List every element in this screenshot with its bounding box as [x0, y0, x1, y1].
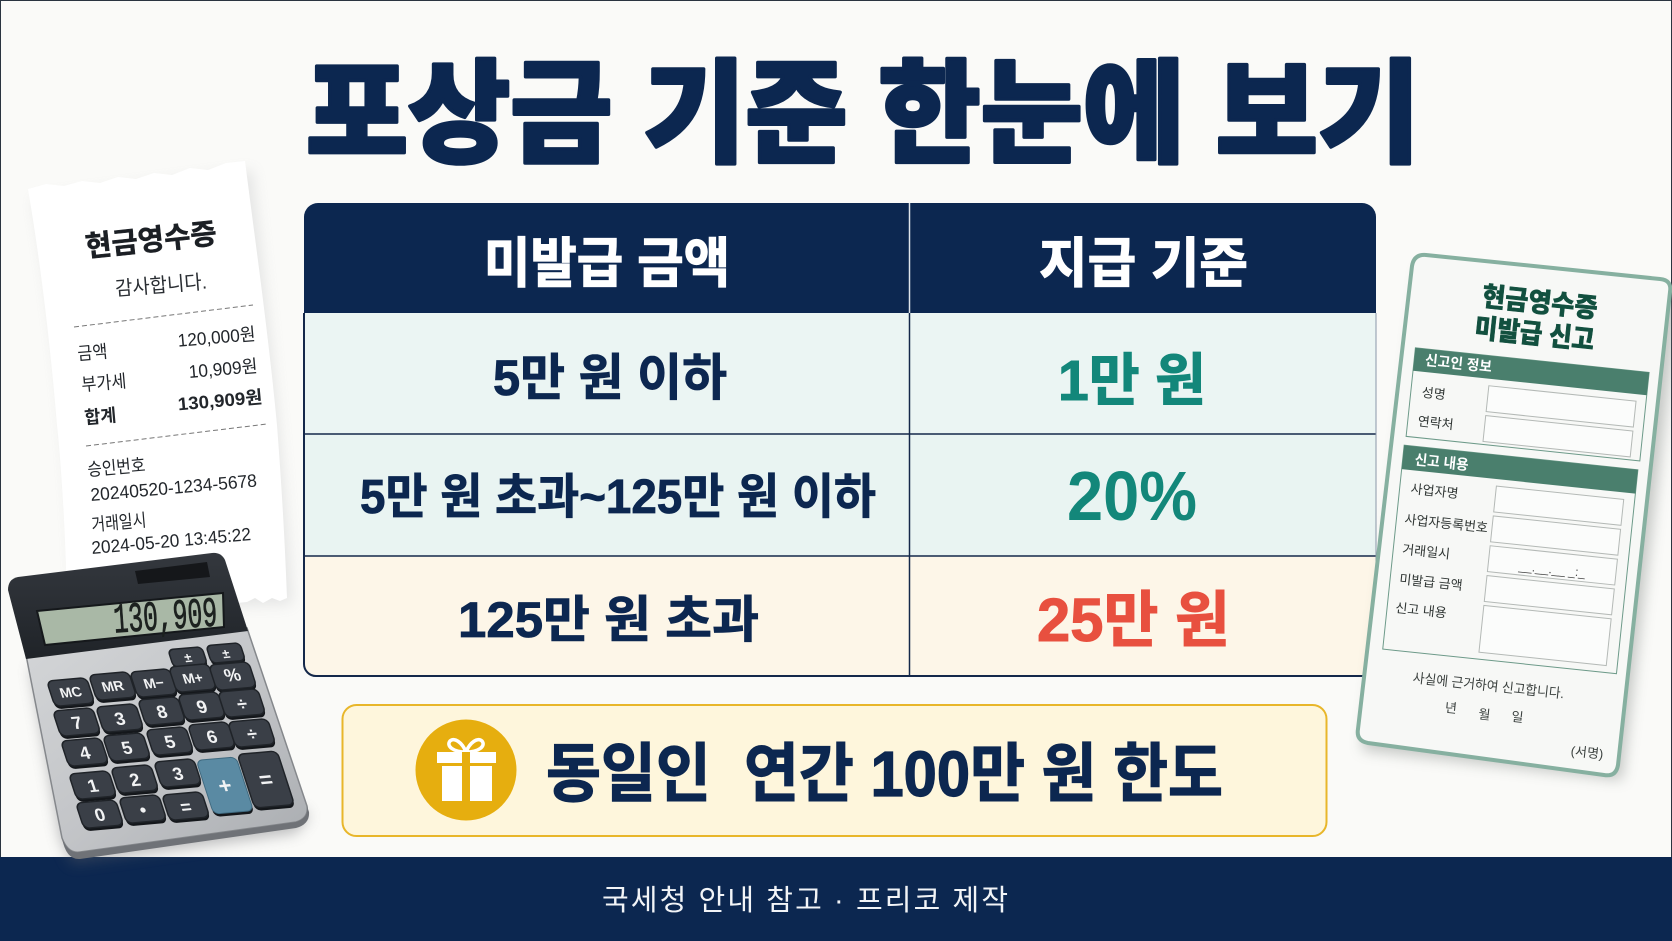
callout: annual limit [342, 705, 1326, 836]
receipt line items: 10,909원 [188, 356, 258, 382]
receipt shadow [34, 170, 292, 610]
calculator keys: 5 [162, 731, 178, 752]
section: report details: 미발급 금액 [1399, 571, 1463, 593]
calculator keys: 3 [170, 763, 186, 784]
calculator keys: ÷ [234, 693, 250, 714]
calculator keys: 8 [154, 701, 170, 722]
calculator keys: 4 [77, 742, 94, 763]
calculator keys: ÷ [244, 723, 260, 744]
calculator [8, 553, 310, 864]
receipt approval and date: 거래일시 [91, 510, 147, 535]
section: report details: 거래일시 [1402, 542, 1451, 562]
section: reporter info: 신고인 정보 [1424, 352, 1493, 376]
calculator keys: % [221, 664, 243, 685]
row 2 amount: 5만 원 초과~125만 원 이하 [360, 471, 876, 524]
section: report details: 신고 내용 [1395, 600, 1447, 621]
table header bar [304, 203, 1376, 313]
receipt heading: 현금영수증 [84, 217, 218, 264]
receipt line items: 130,909원 [177, 387, 263, 414]
receipt approval and date: 20240520-1234-5678 [90, 471, 258, 505]
form date: 월 [1478, 707, 1491, 723]
form signature: (서명) [1570, 743, 1604, 762]
calculator keys: 7 [69, 712, 85, 733]
report form card [1358, 255, 1672, 780]
section: report details: 사업자등록번호 [1404, 512, 1489, 535]
calculator lower edge [62, 806, 309, 859]
calculator keys: = [177, 796, 194, 817]
header: payment basis: 지급 기준 [1039, 234, 1248, 294]
receipt thanks: 감사합니다. [114, 270, 208, 301]
calculator keys: = [256, 767, 276, 792]
receipt approval and date [87, 455, 258, 558]
calculator keys: 9 [194, 696, 210, 717]
form title: 현금영수증 [1481, 282, 1599, 324]
form title [1473, 281, 1599, 355]
dashed divider 2 [86, 424, 267, 446]
table row backgrounds [304, 313, 1376, 676]
calculator keys [47, 643, 295, 831]
LCD display [37, 590, 224, 646]
LCD display: 130,909 [112, 590, 219, 646]
receipt line items: 120,000원 [177, 324, 256, 351]
row 2 reward: 20% [1067, 457, 1197, 535]
calculator keys: 1 [85, 775, 101, 796]
calculator keys: 6 [204, 726, 220, 747]
row 3 reward: 25만 원 [1037, 586, 1230, 654]
calculator keys: 0 [92, 804, 108, 825]
calculator silver body [26, 628, 307, 852]
calculator keys: 3 [112, 708, 128, 729]
row 1 amount: 5만 원 이하 [493, 350, 727, 406]
footer bar [0, 857, 1672, 941]
callout text: 동일인 연간 100만 원 한도 [546, 738, 1223, 810]
form declaration: 사실에 근거하여 신고합니다. [1412, 670, 1565, 701]
calculator keys: M− [142, 675, 166, 693]
calculator keys: 2 [127, 769, 143, 790]
card body [1358, 255, 1670, 775]
solar panel [135, 562, 210, 584]
form date: 년 [1444, 700, 1458, 716]
icon: gift [416, 720, 516, 820]
calculator keys: • [136, 799, 149, 820]
section: reporter info: 연락처 [1417, 414, 1454, 432]
footer text: 국세청 안내 참고 · 프리코 제작 [602, 885, 1008, 917]
receipt line items [77, 324, 263, 428]
form title: 미발급 신고 [1473, 313, 1596, 355]
section: report details: 사업자명 [1410, 481, 1459, 501]
form date: 일 [1511, 709, 1524, 725]
calculator keys: + [215, 773, 235, 798]
form date [1444, 700, 1524, 726]
receipt paper [28, 161, 287, 620]
calculator shadow and base [30, 665, 310, 864]
receipt approval and date: 승인번호 [87, 455, 146, 480]
calculator dark top [8, 553, 248, 659]
receipt [28, 161, 292, 620]
card contents [1373, 275, 1657, 762]
calculator keys: MR [100, 678, 126, 696]
card shadow [1362, 268, 1672, 780]
calculator keys: MC [58, 684, 84, 702]
section: reporter info [1406, 348, 1649, 461]
receipt line items: 금액 [77, 341, 108, 364]
section: report details: 신고 내용 [1414, 451, 1469, 474]
section: report details: __.__.__ _:_ [1517, 559, 1586, 580]
title: 포상금 기준 한눈에 보기 [306, 52, 1420, 177]
calculator keys: ± [182, 650, 194, 665]
row 3 amount: 125만 원 초과 [458, 592, 759, 648]
column divider line [908, 203, 910, 676]
calculator keys: 5 [119, 737, 135, 758]
section: report details [1383, 445, 1638, 674]
header: unissued amount: 미발급 금액 [484, 234, 730, 294]
receipt approval and date: 2024-05-20 13:45:22 [91, 524, 252, 558]
calculator keys: ± [220, 646, 232, 661]
receipt line items: 합계 [84, 405, 117, 428]
dashed divider 1 [74, 305, 253, 327]
row 1 reward: 1만 원 [1058, 349, 1206, 413]
section: reporter info: 성명 [1421, 385, 1446, 402]
panel: reward table [304, 203, 1376, 676]
calculator keys: M+ [181, 670, 205, 688]
receipt line items: 부가세 [81, 371, 127, 395]
